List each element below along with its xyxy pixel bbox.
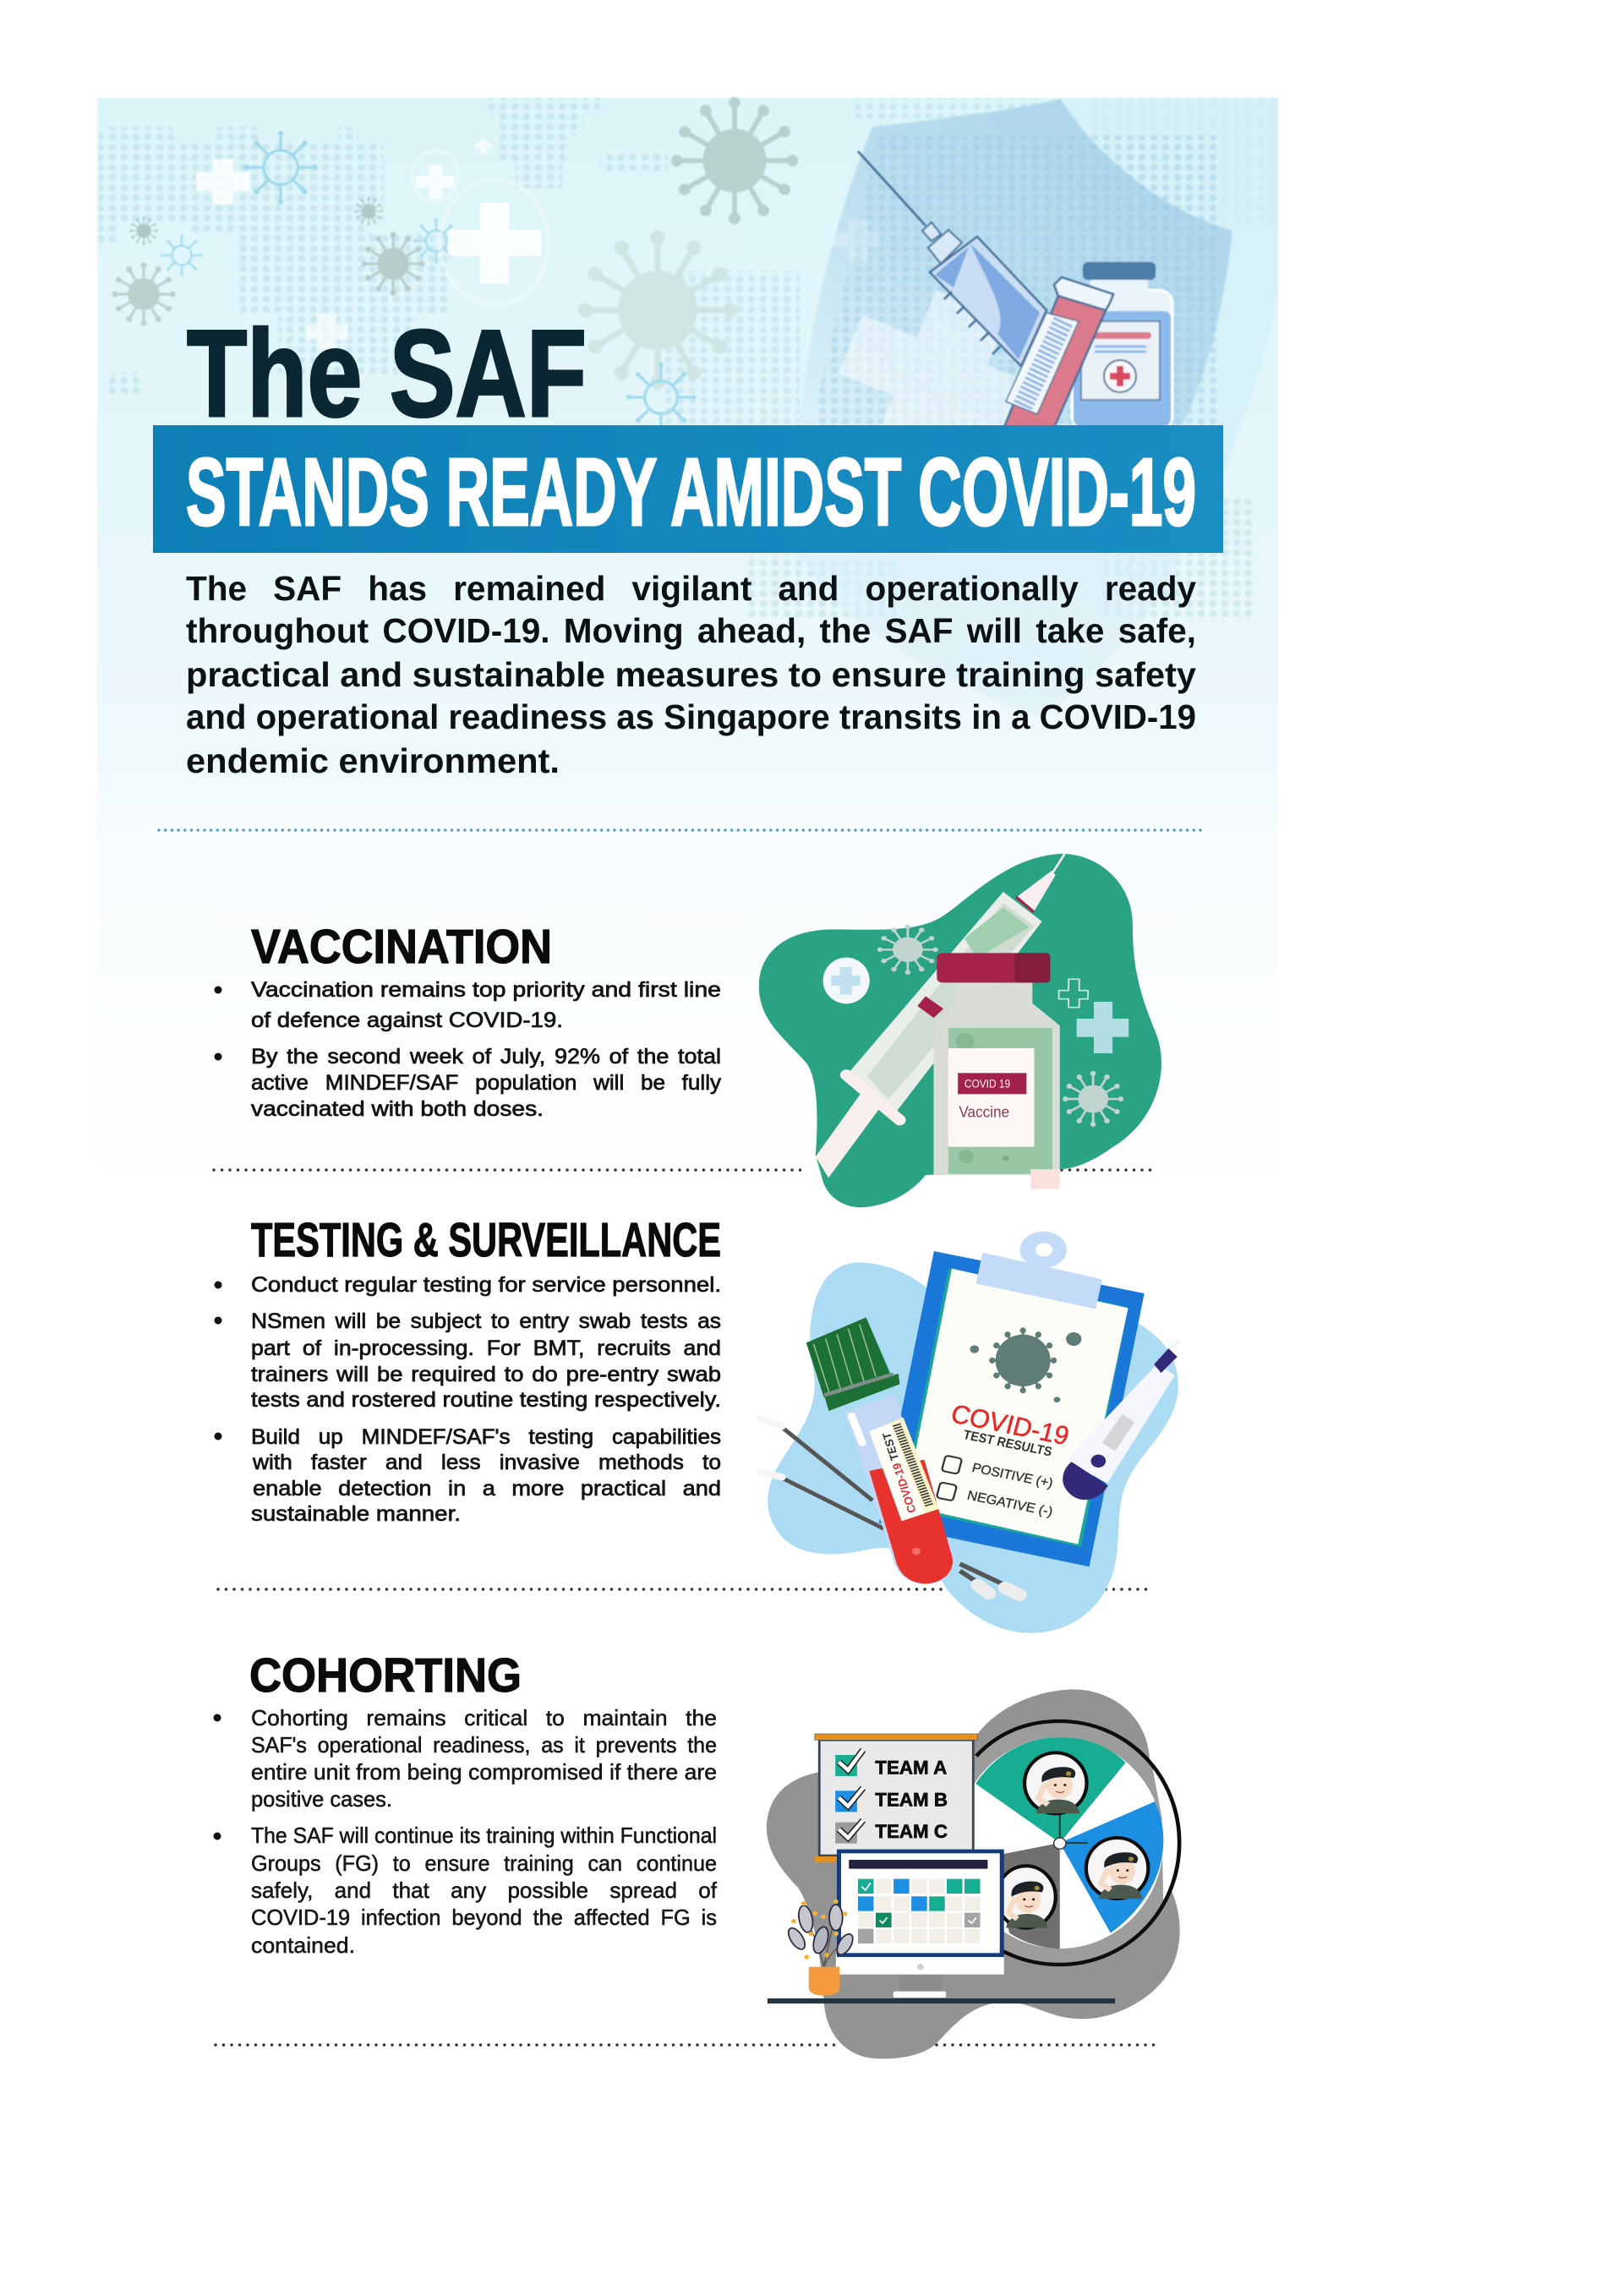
green blob xyxy=(759,854,1161,1207)
intro paragraph: endemic environment. xyxy=(186,741,560,780)
monitor with calendar xyxy=(836,1851,1004,1998)
test result label: POSITIVE (+) xyxy=(970,1461,1054,1490)
heading: vaccination: VACCINATION xyxy=(251,920,552,974)
bullet list: testing xyxy=(215,1273,721,1526)
test result label: COVID-19 xyxy=(948,1398,1072,1451)
bullet list: cohorting: Cohorting remains critical to maintain the xyxy=(251,1705,717,1730)
icon: vaccine vial: COVID 19 xyxy=(965,1078,1010,1091)
white medical crosses xyxy=(196,139,1069,500)
bullet list: cohorting: SAF's operational readiness, as it prevents the xyxy=(251,1732,717,1758)
panel: vaccination text xyxy=(215,920,722,1121)
icon: swabs xyxy=(761,1419,1019,1595)
icon: virus on sheet xyxy=(970,1331,1081,1402)
icon: viruses xyxy=(880,927,1121,1124)
illustration: cohort team wheel, board and monitor xyxy=(767,1689,1180,2058)
team board: TEAM C xyxy=(875,1821,948,1842)
illustration: vaccine vial and syringe xyxy=(759,854,1161,1207)
bullet list: vaccination: By the second week of July, 92% of the total xyxy=(251,1045,721,1069)
intro paragraph xyxy=(186,569,1196,780)
desk xyxy=(768,1998,1115,2004)
bullet list: cohorting: contained. xyxy=(251,1932,355,1958)
bullet list: cohorting xyxy=(213,1705,718,1958)
bullet list: testing: part of in-processing. For BMT, recruits and xyxy=(251,1337,721,1360)
grey blob xyxy=(767,1689,1180,2058)
world map dot pattern xyxy=(99,98,1278,621)
team B soldier xyxy=(1086,1838,1148,1899)
icon: syringe xyxy=(816,854,1064,1178)
bullet list: vaccination: Vaccination remains top priority and first line xyxy=(251,978,721,1002)
bullet list: cohorting: safely, and that any possible spread of xyxy=(251,1878,718,1903)
title banner xyxy=(153,425,1223,553)
header panel with fading light-blue background xyxy=(97,98,1278,1214)
icon: blood test tube: COVID-19 TEST xyxy=(879,1431,919,1514)
clipboard xyxy=(879,1232,1145,1566)
test result label: TEST RESULTS xyxy=(962,1428,1053,1459)
bullet list: testing: with faster and less invasive methods to xyxy=(252,1451,721,1474)
rotating team wheel xyxy=(939,1721,1179,1965)
calendar grid xyxy=(858,1879,981,1943)
team board xyxy=(815,1734,978,1862)
team A soldier xyxy=(1025,1752,1087,1813)
bullet list: vaccination: vaccinated with both doses. xyxy=(251,1097,544,1121)
virus icons xyxy=(115,103,1062,430)
bullet list: testing: tests and rostered routine testing respectively. xyxy=(251,1388,721,1412)
intro paragraph: The SAF has remained vigilant and operationally ready xyxy=(186,569,1196,608)
icon: header blood tube xyxy=(1003,277,1113,431)
icon: vaccine vial xyxy=(933,953,1060,1189)
panel: testing and surveillance text xyxy=(215,1213,721,1526)
icon: crosses xyxy=(1059,979,1128,1053)
bullet list: vaccination xyxy=(215,978,722,1121)
intro paragraph: and operational readiness as Singapore transits in a COVID-19 xyxy=(186,697,1196,736)
icon: header vaccine vial xyxy=(1072,262,1172,429)
team C soldier xyxy=(997,1866,1056,1928)
bullet list: testing: Build up MINDEF/SAF's testing capabilities xyxy=(251,1425,721,1449)
intro paragraph: throughout COVID-19. Moving ahead, the SAF will take safe, xyxy=(186,611,1196,650)
bullet list: cohorting: positive cases. xyxy=(251,1786,392,1812)
heading: cohorting: COHORTING xyxy=(249,1648,522,1703)
shield xyxy=(800,99,1278,719)
bullet list: vaccination: active MINDEF/SAF population will be fully xyxy=(251,1071,722,1095)
bullet list: vaccination: of defence against COVID-19. xyxy=(251,1009,563,1032)
bullet list: cohorting: Groups (FG) to ensure training can continue xyxy=(251,1850,717,1876)
title: The SAF: The SAF xyxy=(187,304,587,442)
bullet list: testing: NSmen will be subject to entry swab tests as xyxy=(251,1309,721,1333)
icon: thermometer xyxy=(1063,1342,1180,1500)
team board: TEAM A xyxy=(875,1757,947,1778)
test result label xyxy=(937,1398,1072,1519)
bullet list: cohorting: COVID-19 infection beyond the affected FG is xyxy=(251,1905,717,1930)
icon: vaccine vial: Vaccine xyxy=(959,1104,1009,1121)
bullet list: testing: enable detection in a more practical and xyxy=(253,1477,721,1501)
panel: cohorting text xyxy=(213,1648,718,1958)
light blue blob xyxy=(768,1262,1178,1633)
test result label: NEGATIVE (-) xyxy=(965,1489,1054,1519)
bullet list: testing: sustainable manner. xyxy=(251,1502,461,1526)
bullet list: cohorting: The SAF will continue its training within Functional xyxy=(251,1823,717,1848)
icon: blue cross in white circle xyxy=(823,958,870,1003)
icon: blood test tube xyxy=(806,1317,954,1584)
heading: testing and surveillance: TESTING & SURVEILLANCE xyxy=(251,1213,721,1267)
bullet list: testing: Conduct regular testing for service personnel. xyxy=(251,1273,721,1297)
intro paragraph: practical and sustainable measures to ensure training safety xyxy=(186,655,1196,694)
icon: header syringe xyxy=(858,151,1046,366)
bullet list: testing: trainers will be required to do pre-entry swab xyxy=(251,1363,721,1386)
icon: potted plant xyxy=(785,1901,856,1996)
team board: TEAM B xyxy=(875,1789,948,1810)
illustration: covid test clipboard, tube and thermometer xyxy=(761,1232,1180,1633)
bullet list: cohorting: entire unit from being compromised if there are xyxy=(251,1759,717,1785)
